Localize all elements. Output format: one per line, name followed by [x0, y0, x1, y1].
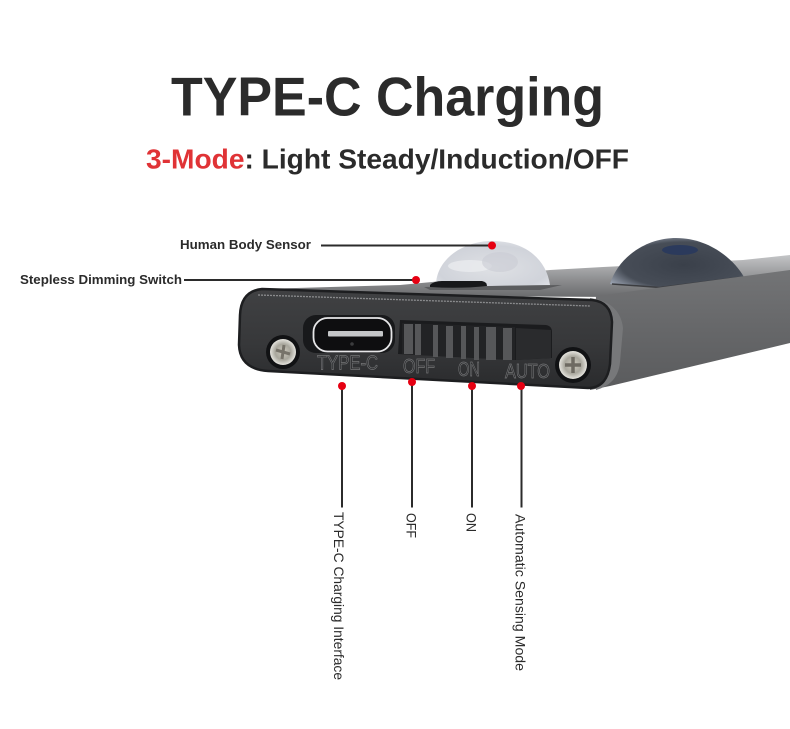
- right screw: [555, 347, 591, 383]
- title: TYPE-C Charging: [171, 66, 604, 128]
- embossed face labels: ON: [458, 359, 480, 381]
- embossed face labels: TYPE-C: [317, 352, 378, 374]
- product photo: sensor device: [239, 238, 790, 390]
- face highlight line: [258, 295, 590, 306]
- callout: ON: [464, 382, 480, 532]
- mode slider switch: [398, 320, 552, 360]
- callout: Stepless Dimming Switch: [20, 272, 420, 287]
- subtitle: 3-Mode: Light Steady/Induction/OFF: [146, 144, 629, 174]
- device front face: [239, 289, 612, 388]
- first sensor dome: [436, 241, 550, 286]
- callout: Automatic Sensing Mode: Automatic Sensing Mode: [512, 514, 528, 671]
- USB-C port: [303, 315, 395, 353]
- sensor shadow: [424, 285, 562, 290]
- callout: Human Body Sensor: Human Body Sensor: [180, 237, 311, 252]
- callout: OFF: [404, 378, 420, 538]
- device top surface: [262, 255, 790, 297]
- embossed face labels: OFF: [403, 356, 435, 378]
- callout: Automatic Sensing Mode: [512, 382, 528, 671]
- callout: TYPE-C Charging Interface: [331, 382, 347, 680]
- callout: ON: ON: [464, 513, 480, 532]
- embossed face labels: [317, 352, 550, 383]
- callout: Stepless Dimming Switch: Stepless Dimming Switch: [20, 272, 182, 287]
- sensor base: [430, 281, 487, 288]
- callout: TYPE-C Charging Interface: TYPE-C Charging Interface: [331, 512, 347, 680]
- second sensor dome: [610, 238, 744, 288]
- embossed face labels: AUTO: [505, 361, 550, 383]
- callout: OFF: OFF: [404, 513, 420, 538]
- device side: [590, 270, 790, 390]
- callout: Human Body Sensor: [180, 237, 496, 252]
- corner bevel: [590, 298, 623, 390]
- left screw: [266, 335, 300, 369]
